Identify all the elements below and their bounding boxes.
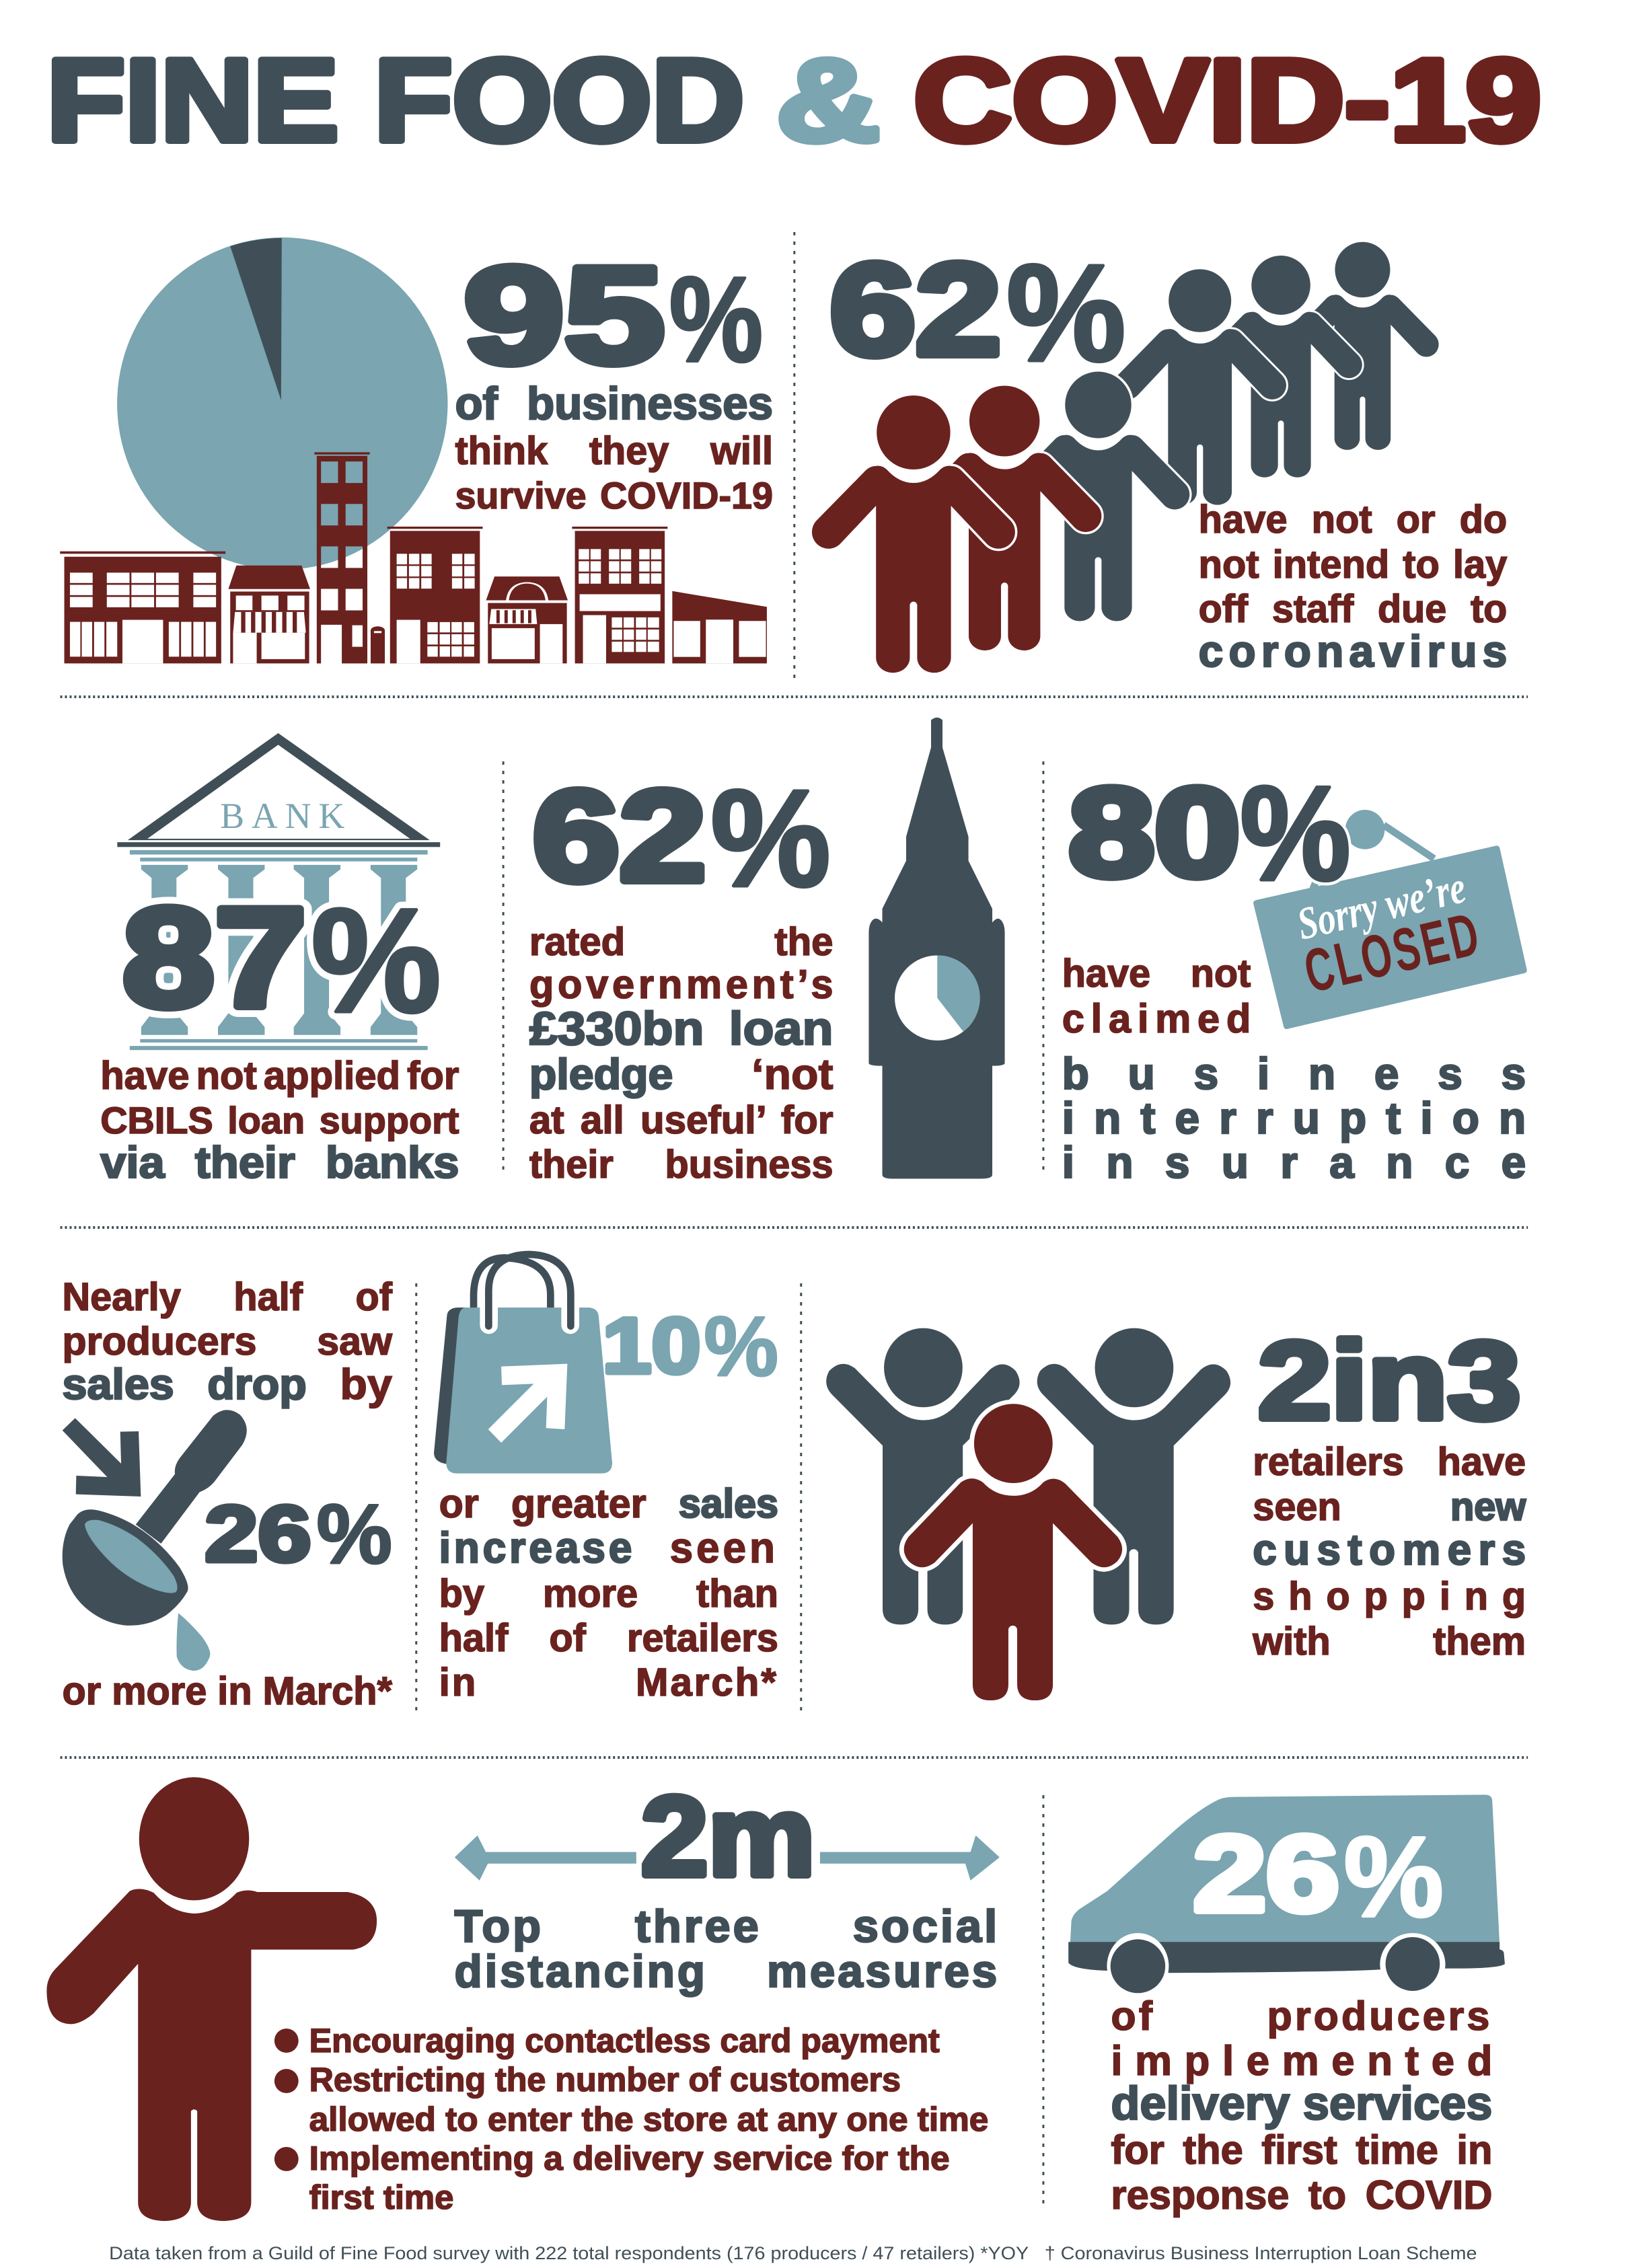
title: &	[776, 35, 880, 165]
bullet list: Encouraging contactless card payment	[309, 2022, 940, 2059]
stat: 95%: 95	[464, 239, 665, 392]
text: of producers implemented delivery services for the first time in response to COVID: delivery services	[1111, 2077, 1492, 2129]
stat: 80%: 80	[1069, 762, 1240, 903]
text: of businesses think they will survive COVID-19: of businesses	[455, 379, 773, 429]
text: or greater sales increase seen by more than half of retailers in March: in March*	[439, 1661, 778, 1704]
stat: 62%	[533, 762, 831, 915]
panel: 26% delivery services	[1068, 1794, 1505, 2218]
stat: 62%: %	[710, 762, 831, 915]
stat: 2m: 2m	[641, 1773, 815, 1899]
stat: 26%: %	[1344, 1813, 1444, 1940]
bullet list: first time	[309, 2179, 453, 2216]
stat: 87%: %	[311, 878, 441, 1043]
stat: 26%: %	[317, 1488, 392, 1581]
text: rated the government's £330bn loan pledge 'not at all useful' for their business: £330bn loan	[529, 1002, 834, 1055]
stat: 26%: 26	[205, 1489, 311, 1578]
panel: 80% business interruption insurance	[1062, 759, 1526, 1187]
text: retailers have seen new customers shopping with them: with them	[1252, 1620, 1526, 1663]
panel: retailers 10% increase	[434, 1254, 778, 1704]
text: have not or do not intend to lay off staff due to coronavirus: off staff due to	[1199, 588, 1507, 631]
icon: Big Ben clock tower	[868, 718, 1005, 1178]
pie chart	[117, 237, 448, 570]
text: have not claimed business interruption insurance: claimed	[1062, 996, 1251, 1041]
text: of businesses think they will survive COVID-19: think they will	[455, 430, 773, 473]
text: retailers have seen new customers shopping with them: shopping	[1253, 1575, 1526, 1618]
text: rated the government's £330bn loan pledge 'not at all useful' for their business	[529, 921, 834, 1186]
bullet list	[274, 2022, 988, 2216]
text: or greater sales increase seen by more than half of retailers in March: increase seen	[439, 1523, 778, 1572]
text: retailers have seen new customers shopping with them: seen new	[1253, 1486, 1526, 1529]
title	[47, 35, 1541, 165]
text: of producers implemented delivery services for the first time in response to COVID: implemented	[1111, 2038, 1492, 2084]
arrow: two metres span	[455, 1836, 1000, 1881]
icon: person pointing	[46, 1777, 377, 2221]
panel: 62% not laying off staff	[812, 237, 1507, 676]
text: have not claimed business interruption insurance: business	[1062, 1049, 1526, 1098]
text: of producers implemented delivery services for the first time in response to COVID: for the first time in	[1111, 2127, 1492, 2172]
stat: 2 in 3: 2in3	[1258, 1319, 1520, 1442]
heading: top three social distancing measures: Top three social	[454, 1901, 1000, 1952]
text: or greater sales increase seen by more than half of retailers in March: half of retailers	[439, 1617, 778, 1660]
text: have not applied for CBILS loan support via their banks: CBILS loan support	[100, 1099, 459, 1141]
text: have not or do not intend to lay off staff due to coronavirus: coronavirus	[1199, 626, 1507, 676]
stat: 80%	[1069, 759, 1351, 909]
text: or greater sales increase seen by more than half of retailers in March: or greater sales	[439, 1481, 778, 1526]
bullet list: allowed to enter the store at any one time	[309, 2101, 988, 2138]
title: FINE FOOD	[47, 35, 744, 165]
stat: 62%: 62	[533, 764, 706, 908]
icon: sorry we're closed sign: CLOSED	[1298, 900, 1487, 1006]
text: nearly half of producers saw sales drop by: sales drop by	[63, 1360, 392, 1408]
icon: ladle with down arrow and drip	[63, 1410, 247, 1671]
icon: sorry we're closed sign	[1256, 810, 1524, 1026]
stat: 10%: 10	[602, 1301, 701, 1390]
text: have not claimed business interruption insurance: interruption	[1062, 1093, 1526, 1143]
panel: 2 in 3 retailers	[826, 1319, 1526, 1700]
stat: 80%: %	[1240, 759, 1351, 909]
stat: 10%	[602, 1300, 778, 1394]
text: of businesses think they will survive COVID-19: survive COVID-19	[455, 474, 773, 517]
text: retailers have seen new customers shopping with them: retailers have	[1253, 1441, 1526, 1484]
text: have not or do not intend to lay off staff due to coronavirus	[1199, 498, 1507, 676]
text: or greater sales increase seen by more than half of retailers in March: by more than	[439, 1573, 778, 1616]
text: have not applied for CBILS loan support via their banks: via their banks	[100, 1137, 459, 1187]
text: rated the government's £330bn loan pledge 'not at all useful' for their business: their business	[529, 1143, 834, 1186]
text: of producers implemented delivery services for the first time in response to COVID: of producers	[1111, 1994, 1492, 2039]
text: nearly half of producers saw sales drop by: producers saw	[63, 1320, 393, 1363]
text: or more in March: or more in March*	[63, 1670, 392, 1713]
text: retailers have seen new customers shopping with them	[1252, 1441, 1526, 1663]
stat: 62%	[830, 237, 1125, 390]
stat: 87%: 87	[122, 879, 307, 1036]
text: have not claimed business interruption insurance: have not	[1062, 952, 1251, 995]
panel: 62% government loan	[529, 718, 1005, 1186]
stat: 87%: 87	[122, 879, 307, 1036]
icon: high street buildings	[60, 452, 767, 663]
stat: 87%	[122, 878, 441, 1043]
icon: row of people	[812, 242, 1439, 673]
panel: 95% of businesses	[60, 237, 773, 663]
bullet list: Restricting the number of customers	[309, 2061, 901, 2099]
panel: social distancing	[46, 1773, 1000, 2221]
stat: 62%: 62	[830, 237, 1001, 383]
text: nearly half of producers saw sales drop by	[63, 1276, 393, 1408]
icon: bank building: BANK	[220, 796, 344, 836]
text: have not applied for CBILS loan support via their banks: have not applied for	[100, 1055, 459, 1098]
text: rated the government's £330bn loan pledge 'not at all useful' for their business: at all useful’ for	[529, 1099, 834, 1142]
title: COVID-19	[914, 35, 1541, 165]
stat: 26%: 26	[1193, 1814, 1339, 1934]
stat: 95%: %	[669, 252, 763, 387]
stat: 62%: %	[1006, 237, 1125, 390]
stat: 26%	[205, 1488, 392, 1581]
bullet list: Implementing a delivery service for the	[309, 2140, 950, 2177]
heading: top three social distancing measures: distancing measures	[454, 1946, 1000, 1997]
icon: delivery van	[1068, 1794, 1505, 2000]
text: have not applied for CBILS loan support via their banks	[100, 1055, 459, 1187]
footer: data source note: Data taken from a Guild of Fine Food survey with 222 total respondents (176 producers / 47 retailers) *YOY † Coronavirus Business Interruption Loan Scheme	[109, 2243, 1477, 2263]
stat: 95%	[464, 239, 763, 392]
text: have not claimed business interruption insurance	[1062, 952, 1526, 1187]
panel: producers sales drop 26%	[63, 1276, 393, 1713]
heading: top three social distancing measures	[454, 1901, 1000, 1997]
icon: sorry we're closed sign: Sorry we’re	[1292, 862, 1470, 950]
text: have not or do not intend to lay off staff due to coronavirus: have not or do	[1199, 498, 1507, 541]
text: nearly half of producers saw sales drop by: Nearly half of	[63, 1276, 393, 1319]
stat: 10%: %	[704, 1300, 778, 1394]
stat: 87%: %	[311, 878, 441, 1043]
text: retailers have seen new customers shopping with them: customers	[1253, 1525, 1526, 1574]
icon: shopping bag with up arrow	[434, 1254, 612, 1474]
text: or greater sales increase seen by more than half of retailers in March	[439, 1481, 778, 1704]
text: of producers implemented delivery services for the first time in response to COVID: response to COVID	[1111, 2172, 1492, 2218]
stat: 80%: %	[1240, 759, 1351, 909]
text: of businesses think they will survive COVID-19	[455, 379, 773, 517]
text: rated the government's £330bn loan pledge 'not at all useful' for their business: rated the	[529, 921, 834, 964]
text: of producers implemented delivery services for the first time in response to COVID	[1111, 1994, 1492, 2218]
text: rated the government's £330bn loan pledge 'not at all useful' for their business: pledge ‘not	[529, 1050, 834, 1098]
text: have not claimed business interruption insurance: insurance	[1062, 1137, 1526, 1187]
stat: 26%	[1193, 1813, 1444, 1940]
icon: group of three people	[826, 1328, 1230, 1700]
icon: bank building	[117, 733, 440, 1050]
text: rated the government's £330bn loan pledge 'not at all useful' for their business: government’s	[529, 962, 834, 1007]
text: have not or do not intend to lay off staff due to coronavirus: not intend to lay	[1199, 543, 1507, 587]
panel: 87% CBILS	[100, 733, 459, 1187]
